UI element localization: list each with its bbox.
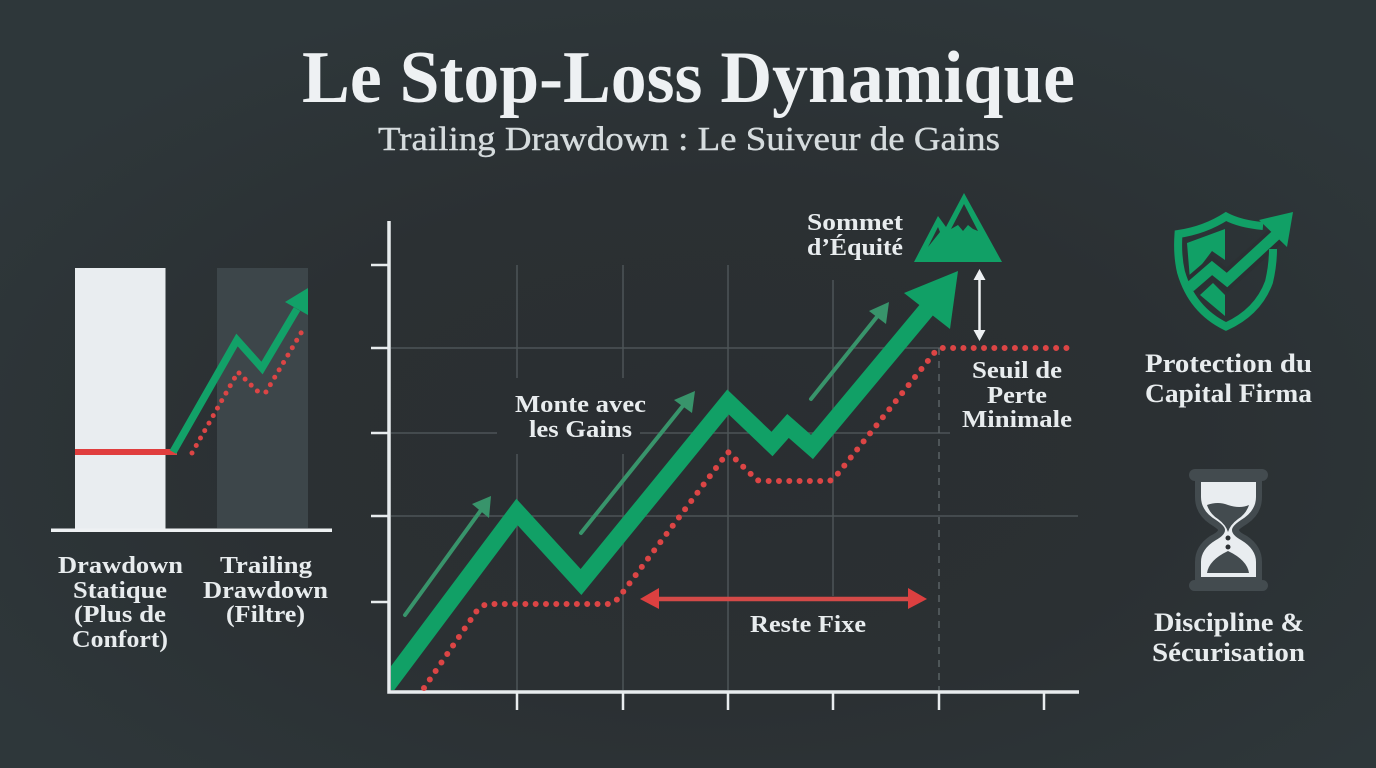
icon: shield with rising arrow [1178, 212, 1293, 326]
trailing red dotted line [192, 328, 304, 453]
label: static drawdown: (Plus de [74, 602, 166, 628]
label: rises with gains: Monte avec [515, 392, 646, 418]
label: minimum loss threshold: Perte [987, 383, 1047, 409]
trailing green arrow [173, 288, 308, 452]
rising trend arrow three [811, 302, 889, 399]
panel: comparison of static and trailing drawdown [51, 268, 332, 653]
static drawdown bar [75, 268, 166, 530]
label: discipline and security: Sécurisation [1152, 638, 1306, 667]
label: minimum loss threshold [962, 358, 1072, 433]
icon: hourglass [1189, 469, 1268, 591]
label: minimum loss threshold: Seuil de [972, 358, 1062, 384]
label: static drawdown: Drawdown [58, 553, 183, 579]
chart axes [371, 221, 1079, 710]
icon: mountain summit [914, 193, 1002, 262]
label: stays fixed: Reste Fixe [750, 612, 866, 638]
static stop level red line [75, 449, 177, 455]
label: static drawdown [58, 553, 183, 653]
label: minimum loss threshold: Minimale [962, 407, 1072, 433]
label: equity peak: d’Équité [807, 235, 903, 261]
panel: discipline and security [1152, 469, 1306, 667]
label: capital protection: Protection du [1145, 349, 1312, 378]
baseline [51, 528, 332, 532]
label: rises with gains [515, 392, 646, 443]
label: trailing drawdown: Drawdown [203, 578, 328, 604]
label: discipline and security: Discipline & [1154, 608, 1304, 637]
label: trailing drawdown: Trailing [220, 553, 312, 579]
trailing drawdown bar [217, 268, 308, 528]
panel: capital protection [1145, 212, 1312, 408]
label: equity peak: Sommet [807, 210, 903, 236]
label: static drawdown: Statique [73, 578, 167, 604]
trailing stop red dotted line [424, 348, 1076, 688]
equity curve green arrow [380, 271, 958, 695]
label: capital protection: Capital Firma [1145, 379, 1312, 408]
title: Le Stop-Loss Dynamique [302, 37, 1075, 119]
label: rises with gains: les Gains [529, 417, 632, 443]
label: capital protection [1145, 349, 1312, 408]
panel: main trailing drawdown chart [371, 193, 1079, 710]
label: equity peak [807, 210, 903, 261]
white double arrow gap [974, 269, 986, 341]
rising trend arrow two [581, 391, 695, 533]
label: trailing drawdown [203, 553, 328, 628]
label: discipline and security [1152, 608, 1306, 667]
label: static drawdown: Confort) [72, 627, 168, 653]
label: trailing drawdown: (Filtre) [226, 602, 305, 628]
rising trend arrow one [405, 496, 491, 615]
infographic canvas [51, 50, 1312, 710]
subtitle: Trailing Drawdown : Le Suiveur de Gains [378, 121, 1000, 158]
fixed level red double arrow [640, 588, 927, 609]
